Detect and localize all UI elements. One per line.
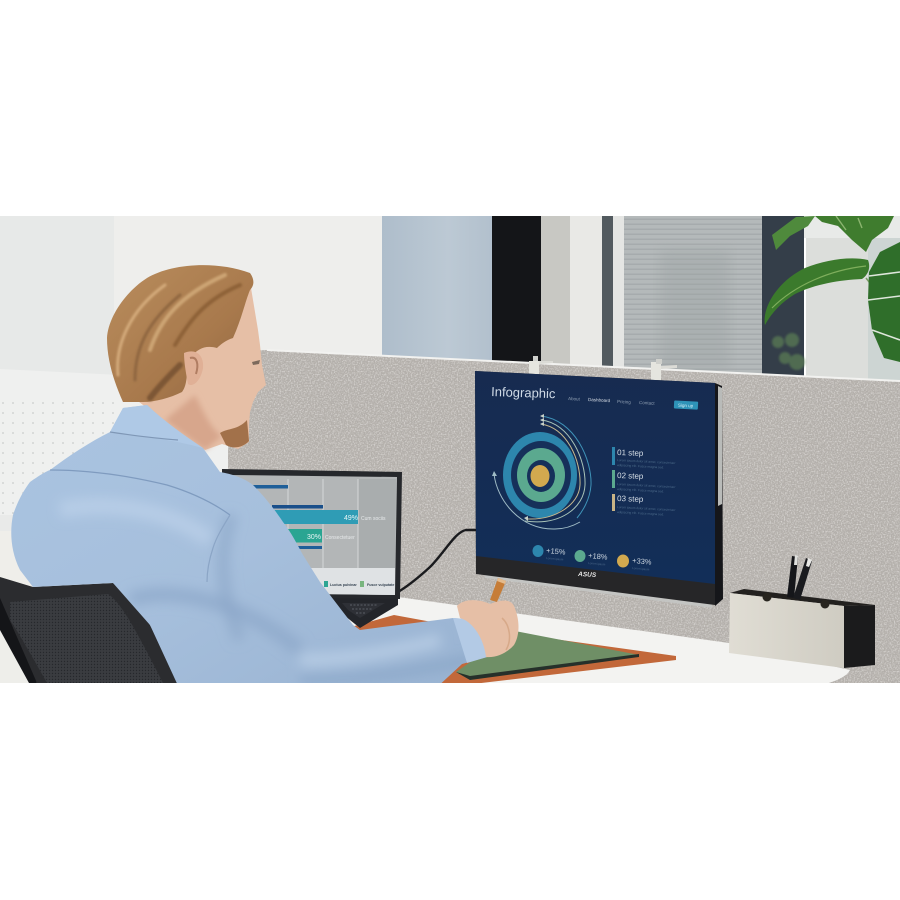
eye (252, 360, 260, 365)
icon: potted plant (765, 216, 900, 370)
laptop screen (230, 475, 397, 595)
cheek and jaw shading (165, 395, 222, 450)
shirt shading (60, 506, 470, 680)
screen navigation: Dashboard (588, 397, 611, 403)
screen step 3: 03 step (617, 494, 644, 504)
screen sign up button: Sign up (678, 403, 694, 408)
shirt seams and collar (50, 470, 230, 515)
laptop legend strip (311, 568, 395, 595)
ASUS logo: ASUS (577, 571, 597, 579)
screen stat 33 percent: Lorem ipsum (632, 566, 650, 572)
small plant behind glass (772, 333, 805, 370)
laptop bar chart (247, 485, 386, 549)
screen stat 33 percent (617, 554, 652, 572)
background: office wall and windows (0, 216, 900, 386)
screen step 3: Lorem ipsum dolor sit amet, consectetuer (617, 505, 676, 512)
screen stat 33 percent: +33% (632, 556, 652, 567)
ear (184, 351, 203, 385)
hair (107, 265, 253, 402)
screen stat 15 percent (532, 545, 566, 562)
screen target chart (492, 414, 591, 529)
laptop bar chart: Cum sociis (361, 516, 386, 522)
chart arcs (494, 416, 591, 529)
goatee (220, 420, 249, 447)
left white perforated panel (0, 386, 228, 587)
shirt body and arm (11, 405, 494, 690)
monitor screen (475, 371, 715, 584)
monitor side edge (715, 383, 723, 606)
screen navigation: About (568, 396, 581, 402)
neck and face (130, 282, 266, 450)
screen stat 18 percent: +18% (588, 551, 608, 562)
laptop bar chart: Consectetuer (325, 535, 355, 541)
screen step 1 (612, 447, 676, 469)
USB cable (398, 530, 476, 592)
screen navigation: Pricing (617, 399, 631, 405)
screen sign up button (674, 400, 698, 410)
laptop bar chart: 49% (344, 515, 358, 522)
pen holder box (729, 555, 875, 668)
right leaves (868, 242, 900, 362)
laptop lid (222, 469, 402, 599)
green folder (456, 631, 639, 680)
laptop base (330, 596, 398, 628)
screen navigation: Contact (639, 400, 655, 406)
hand (457, 600, 518, 657)
screen step 1: adipiscing elit. Fusce magna sed. (617, 463, 664, 469)
screen step 1: 01 step (617, 448, 644, 458)
laptop bar chart: 30% (307, 534, 321, 541)
screen stat 15 percent: +15% (546, 546, 566, 557)
monitor silver base strip (485, 574, 712, 608)
screen stat 15 percent: Lorem ipsum (546, 556, 564, 562)
hair highlights (118, 275, 240, 398)
desk mat (354, 615, 676, 683)
laptop legend strip: Fusce vulputate (367, 583, 394, 587)
pens (787, 555, 812, 600)
laptop (222, 469, 402, 628)
top leaves (772, 216, 815, 250)
large leaf (765, 258, 869, 325)
screen step 2: Lorem ipsum dolor sit amet, consectetuer (617, 482, 676, 489)
screen navigation (568, 396, 654, 405)
external monitor (475, 371, 723, 608)
desk (348, 597, 850, 683)
photo scene (0, 216, 900, 683)
laptop legend strip: Luctus pulvinar (330, 583, 357, 587)
clips on partition (529, 356, 677, 382)
screen step 3 (612, 494, 676, 516)
screen step 2: 02 step (617, 471, 644, 481)
screen stat 18 percent: Lorem ipsum (588, 561, 606, 567)
office chair (0, 577, 183, 683)
screen step 3: adipiscing elit. Fusce magna sed. (617, 510, 664, 516)
man (11, 265, 518, 690)
screen step 2 (612, 470, 676, 493)
pencil (490, 578, 506, 602)
screen stat 18 percent (574, 550, 608, 567)
screen step 2: adipiscing elit. Fusce magna sed. (617, 487, 664, 493)
shirt cuff (453, 618, 494, 663)
screen title: Infographic (491, 384, 556, 401)
screen step 1: Lorem ipsum dolor sit amet, consectetuer (617, 458, 676, 465)
partition panel (228, 350, 900, 683)
monitor bezel (475, 371, 715, 605)
